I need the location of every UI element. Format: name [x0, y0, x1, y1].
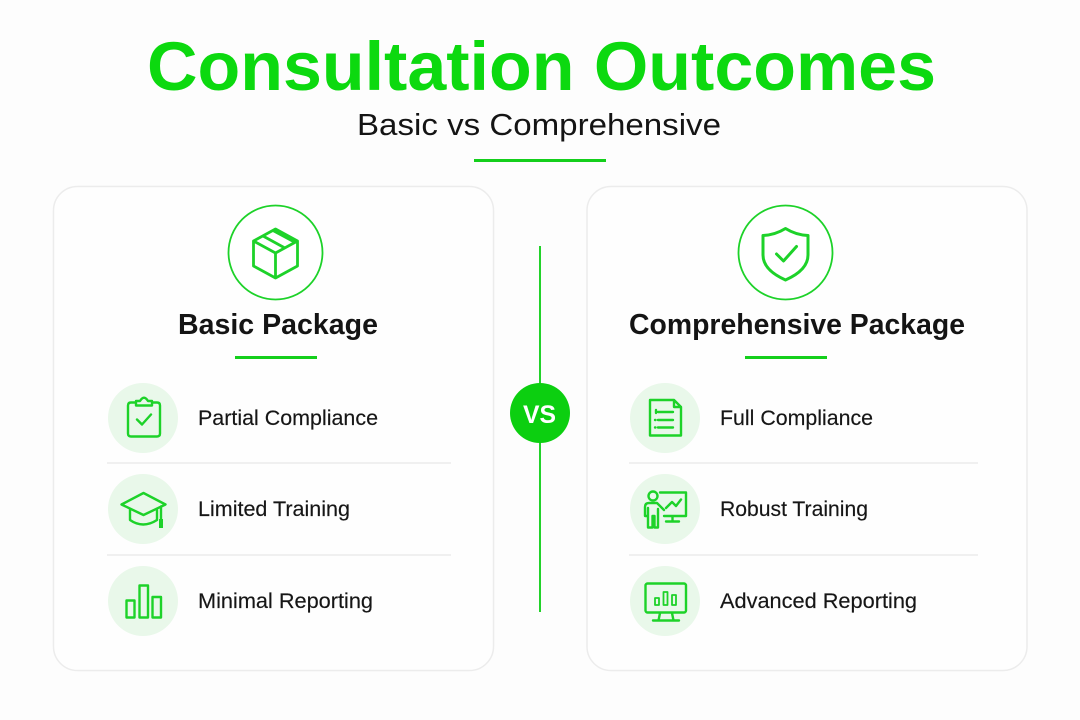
title underline	[474, 159, 606, 162]
item: advanced reporting	[630, 566, 917, 636]
heading underline	[745, 356, 827, 359]
item: minimal reporting: Minimal Reporting	[198, 590, 373, 613]
item: minimal reporting	[108, 566, 373, 636]
heading underline	[235, 356, 317, 359]
item: full compliance	[630, 383, 873, 453]
item: advanced reporting: Advanced Reporting	[720, 590, 917, 613]
vs badge	[510, 383, 570, 443]
heading: basic package: Basic Package	[178, 309, 378, 341]
icon: shield	[738, 206, 832, 300]
center divider line	[539, 246, 541, 612]
item: partial compliance	[108, 383, 378, 453]
item: robust training: Robust Training	[720, 498, 868, 521]
icon: box	[228, 206, 322, 300]
item: limited training	[108, 474, 350, 544]
item: full compliance: Full Compliance	[720, 407, 873, 430]
subtitle: Basic vs Comprehensive	[357, 107, 721, 142]
title: Consultation Outcomes	[147, 28, 936, 105]
panel: basic package	[54, 186, 494, 670]
panel: comprehensive package	[587, 186, 1027, 670]
item: partial compliance: Partial Compliance	[198, 407, 378, 430]
heading: comprehensive package: Comprehensive Package	[629, 309, 965, 341]
vs badge: VS	[523, 401, 556, 429]
item: limited training: Limited Training	[198, 498, 350, 521]
item: robust training	[630, 474, 868, 544]
